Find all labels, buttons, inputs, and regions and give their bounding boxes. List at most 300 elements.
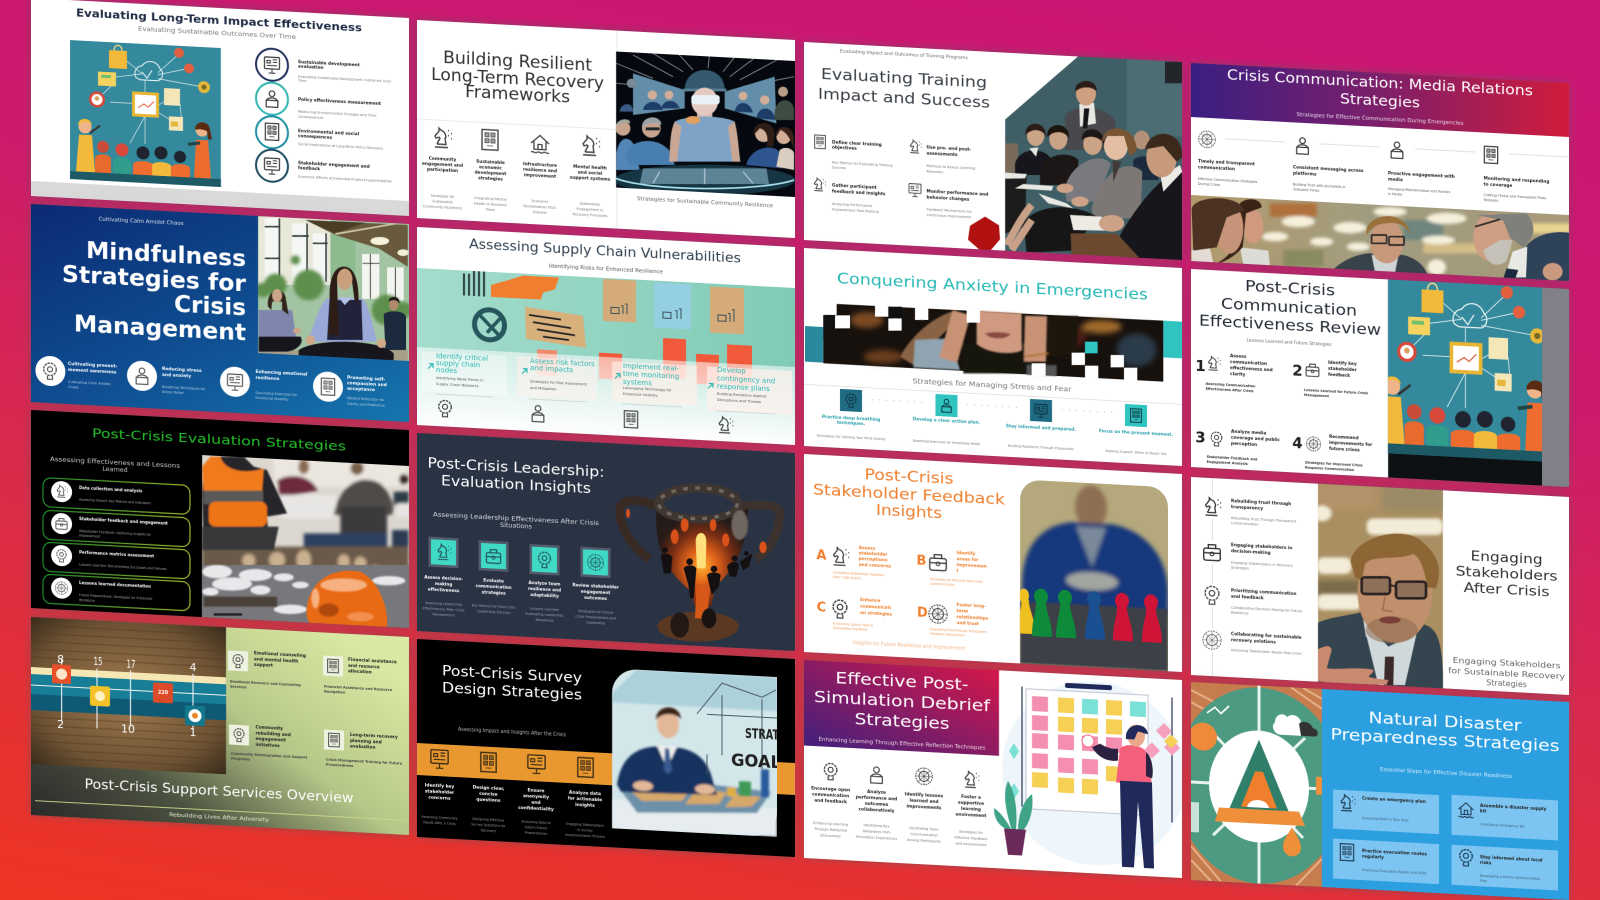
A-D feedback grid: relationships [957,614,989,621]
four communication steps: Releases [1484,198,1498,203]
tagline: Cultivating Calm Amidst Chaos [98,217,184,227]
benefit row [35,355,387,408]
survey columns: Design clear, [473,784,505,792]
stakeholder list: Engaging stakeholders in [1231,542,1292,551]
four debrief columns: Takeaways from [861,829,891,835]
A-D feedback grid: communicati [860,603,892,611]
A-D feedback grid: After Crisis Events [833,575,862,581]
card list: Improvement [79,534,101,539]
title: Post-Crisis [864,465,954,488]
header banner: Crisis Communication: Media Relations [1227,67,1533,100]
leadership steps: Leadership Success [477,609,511,615]
timeline graphic: 10 [121,722,135,736]
four-step strategy row: Develop a clear action plan. [913,416,981,426]
benefit row: Enhancing emotional [255,368,308,377]
four debrief columns: and Improvement [955,842,987,847]
benefit row: compassion and [347,380,387,388]
four debrief columns: outcomes [865,800,889,807]
service grid [228,648,402,771]
four vulnerability steps [428,351,776,435]
stakeholder list: Rebuilding Trust Through Transparent [1231,516,1297,523]
icons row [435,127,600,156]
subtitle: Lessons Learned and Future Strategies [1246,337,1332,348]
title: Preparedness Strategies [1330,724,1560,756]
title: Post-Crisis Survey [442,663,583,687]
title [1456,548,1558,601]
stakeholder list [1202,495,1302,657]
four vulnerability steps: Building Resilience Against [717,392,768,399]
four evaluation tips: Define clear training [832,139,882,148]
title: Impact and Success [818,85,990,112]
survey columns: for actionable [568,795,603,803]
benefit row: Clarity and Resilience [347,402,384,408]
stakeholder list: Rebuilding trust through [1231,498,1291,507]
four evaluation tips: feedback and insights [832,188,886,197]
survey columns: Assessing Community [422,815,458,821]
service grid: Emotional counseling [254,650,306,659]
leadership steps: Analyze team [529,579,561,586]
title: After Crisis [1464,580,1550,600]
preparation cards: regularly [1362,853,1384,860]
leadership steps: adaptability [531,591,559,598]
subtitle: Strategies [1486,678,1527,689]
four-step strategy row: Building Resilience Through Preparation [1008,444,1074,451]
leadership steps: Effectiveness After Crisis [423,606,465,613]
benefit row: Reducing stress [162,365,202,374]
labels: Health in Recovery [474,202,507,207]
A-D feedback grid: Evaluating Post-Through Transparent [930,627,988,634]
panel: slide Effective Post-Simulation Debrief Strategies [804,660,1182,878]
four debrief columns: Analyze [867,788,886,795]
photo: meditating students [258,216,409,361]
illustration: people and network [70,40,221,187]
stakeholder list: Engaging Stakeholders in Recovery [1231,560,1293,568]
benefit row: Mindful Reflection for [347,396,384,402]
leadership steps: Strategies for Future [578,609,613,615]
numbered review items: perception [1231,440,1257,448]
service grid: Programs [231,757,250,762]
subtitle: Learned [102,465,127,473]
four vulnerability steps: Enhanced Visibility [623,392,659,398]
labels: engagement and [422,160,463,168]
service grid: Financial assistance [348,656,396,665]
photo: blurred man and coloured pawns [1020,480,1168,672]
labels: resilience and [523,166,557,174]
subtitle: for Sustainable Recovery [1448,666,1565,681]
four debrief columns: environment [956,811,986,819]
leadership steps: strategies [482,589,506,595]
numbered review items: Stakeholder Feedback and [1207,455,1258,462]
preparation cards: Stay informed about local [1480,854,1543,863]
survey columns: Preparedness [525,831,548,836]
four evaluation tips: Gather participant [832,182,877,190]
leadership steps: Responses [536,618,554,623]
four debrief columns: learned and [910,797,938,805]
header panel: Simulation Debrief [814,687,990,715]
four-step strategy row: techniques. [837,419,866,427]
illustration: person at sticky-note board [994,676,1186,870]
four evaluation tips: Feedback Mechanisms for [926,207,972,214]
photo: woman in helmet at command table [616,52,795,197]
stakeholder list: Assessing Stakeholder Needs Post-Crisis [1231,648,1302,656]
preparation cards: Assessing Risks in Your Area [1362,816,1409,823]
image: supply chain boxes [417,268,795,445]
list: four evaluation items: Consequences [298,115,323,120]
numbered review items: future crises [1329,445,1360,453]
numbered review items: Assess [1230,353,1247,359]
panel: slide Crisis Communication Media Relations Strategies [1191,63,1569,281]
four debrief columns: Communication [910,832,938,838]
list: four evaluation items: Policy effectiveness measurement [298,97,381,107]
card list [43,478,190,611]
A-D feedback grid: areas for [957,556,979,563]
leadership steps: Assess decision- [425,574,464,581]
survey columns: concise [479,790,498,797]
A-D feedback grid: Strategies for Effective Post-Crisis [930,577,983,584]
four debrief columns: and feedback [814,797,847,805]
numbered review items: coverage and public [1231,434,1280,443]
title [818,65,990,112]
list: four evaluation items: Measuring Environmental Changes and Their [298,110,377,118]
timeline graphic: 4 [189,661,196,674]
survey columns: insights [575,801,596,808]
A-D feedback grid: and trust [957,620,979,627]
A-D feedback grid: Communication [930,582,954,587]
stakeholder list: Prioritizing communication [1231,587,1296,597]
leadership steps: engagement [581,588,611,595]
title: Crisis [174,290,246,321]
timeline graphic: 17 [126,658,135,671]
four communication steps: Turbulent Times [1292,188,1320,193]
title: Post-Crisis Evaluation Strategies [92,426,346,454]
subtitle [1448,656,1565,691]
numbered review items: Management [1304,393,1329,398]
header panel: Enhancing Learning Through Effective Reflection Techniques [818,737,986,752]
numbered review items: Recommend [1329,433,1359,441]
service grid: allocation [348,668,371,675]
header panel: Strategies [855,709,950,733]
labels: strategies [478,175,504,182]
title: Effectiveness Review [1199,311,1381,339]
numbered review items: feedback [1328,371,1350,378]
A-D feedback grid: Identify [957,550,976,557]
title: Management [74,309,246,346]
numbered review items [1195,351,1373,473]
service grid: Emotional Recovery and Counseling [230,680,301,687]
labels: Integrating Mental [475,196,507,202]
four vulnerability steps: Identifying Weak Points in [436,376,485,383]
card list: Future Preparedness: Strategies for Enhanced [79,593,152,601]
panel: slide Evaluating Training Impact and Success [804,42,1182,260]
title: Design Strategies [442,680,582,704]
title [442,663,583,704]
four vulnerability steps: Assess risk factors [530,357,595,368]
service grid: evaluation [350,743,375,750]
leadership steps: communication [476,583,512,590]
four vulnerability steps: systems [623,378,653,387]
benefit row: Emotional Stability [255,396,288,402]
service grid: Crisis Management Training for Future [326,758,402,766]
stakeholder list: recovery solutions [1231,637,1276,645]
leadership steps: Key Metrics for Post-Crisis [472,603,516,610]
four evaluation tips [814,135,988,220]
four debrief columns: Encourage open [811,785,850,793]
A-D feedback grid: C [817,600,826,616]
photo: blurred workers and orange beanbag [202,455,409,628]
leadership steps: Crisis Preparedness and [576,614,616,621]
survey columns: Ensure [528,787,545,794]
title: Conquering Anxiety in Emergencies [837,269,1148,304]
benefit row: resilience [255,374,279,382]
preparation cards [1333,789,1558,890]
four debrief columns: supportive [958,799,984,807]
panel: slide Conquering Anxiety in Emergencies [804,248,1182,466]
leadership steps: making [435,580,453,586]
labels: support systems [570,174,611,182]
card list: Stakeholder feedback and engagement [79,516,167,526]
title: Insights [876,501,942,522]
four communication steps: Consistent messaging across [1293,164,1364,173]
A-D feedback grid [816,542,989,639]
title: Evaluating Long-Term Impact Effectiveness [76,7,362,35]
four communication steps: Managing Misinformation and Rumors [1388,187,1451,194]
panel: slide Mindfulness Strategies for Crisis Management [31,204,409,422]
subtitle: Rebuilding Lives After Adversity [169,812,269,824]
title: Building Resilient [443,48,593,75]
A-D feedback grid: stakeholder [859,550,888,558]
numbered review items: Response Communication [1305,466,1355,472]
numbered review items: improvements for [1329,439,1373,448]
tagline: Evaluating Impact and Outcomes of Training Programs [840,48,969,61]
four debrief columns: Discussions [820,833,841,839]
icon: red heptagon [968,216,1000,250]
illustration: preparedness emblem [1191,682,1322,887]
illustration: people and network [1388,279,1542,486]
four vulnerability steps: Supply Chain Networks [436,382,479,388]
leadership steps: Leadership [587,620,605,625]
numbered review items: 3 [1195,428,1206,447]
numbered review items: communication [1230,359,1267,367]
labels: Mental health [573,163,607,171]
service grid: Financial Assistance and Resource [324,685,392,692]
panel: slide Post-Crisis Support Services Overview [31,617,409,835]
card list: Stakeholder Feedback: Gathering Insights for [79,529,151,537]
four debrief columns: improvements [907,803,942,811]
list: four evaluation items: Time [297,79,306,83]
four communication steps: communication [1198,164,1235,172]
labels: economic [479,164,503,171]
photo: tense office conversation [1191,195,1569,281]
labels: Revitalization Post- [524,204,558,210]
photo: seated professionals in boardroom [1005,47,1183,271]
labels: Sustainable [477,158,505,166]
service grid: and resource [348,662,379,670]
four communication steps: platforms [1293,170,1317,177]
numbered review items: 1 [1195,357,1206,375]
survey columns: Engaging Stakeholders [566,822,605,828]
four debrief columns: Effective Feedback [954,835,988,841]
title: Communication [1221,295,1357,320]
A-D feedback grid: Foster long- [957,602,986,609]
subtitle: Strategies for Managing Stress and Fear [912,376,1072,394]
survey columns: Designing Effective [473,817,505,823]
subtitle: Assessing Effectiveness and Lessons [50,456,180,469]
benefit row: Cultivating Calm Amidst [68,380,111,386]
A-D feedback grid: A [816,548,826,564]
title [431,47,605,108]
card list: Data collection and analysis [79,485,143,493]
stakeholder list: Strategies [1231,566,1249,571]
labels: Recovery Processes [573,212,608,218]
leadership steps [423,536,620,626]
title [813,462,1005,526]
survey columns: Needs After a Crisis [424,820,456,826]
preparation cards: kit [1480,808,1486,814]
panel: slide Building Resilient Long-Term Recovery Frameworks [417,20,795,238]
numbered review items: Analyze media [1231,428,1266,436]
panel: slide Post-Crisis Stakeholder Feedback Insights [804,454,1182,672]
labels: Community Resilience [423,204,462,210]
leadership steps: Evaluating Leadership [526,612,564,618]
four evaluation tips: Monitor performance and [926,188,988,197]
subtitle: Assessing Leadership Effectiveness After Crisis [433,510,600,527]
four vulnerability steps: Implement real- [623,362,680,373]
header panel [804,660,999,756]
survey columns: Identify key [425,782,455,789]
A-D feedback grid: on strategies [860,610,893,617]
numbered review items: Engagement Analysis [1207,460,1248,466]
survey columns: anonymity [523,793,549,800]
service grid: initiatives [255,741,280,749]
photo: businessman with strategy sketch [612,669,781,837]
orange band with icons [417,743,795,795]
numbered review items: 2 [1292,361,1303,380]
four communication steps: Proactive engagement with [1388,170,1455,179]
four communication steps: Building Trust with Journalists in [1293,182,1346,189]
numbered review items: Identify key [1328,359,1357,367]
photo banner: stressed woman with checker pattern [805,302,1182,382]
four evaluation tips: assessments [926,150,958,158]
labels: participation [427,166,458,174]
four vulnerability steps: Leveraging Technology for [623,386,672,392]
stakeholder list: Collaborating for sustainable [1231,631,1302,640]
stakeholder list: decision-making [1231,548,1271,556]
stakeholder list: transparency [1231,504,1263,511]
four debrief columns: Enhancing Learning [813,821,848,827]
leadership steps: Review stakeholder [573,582,620,589]
four evaluation tips: Use pre- and post- [926,144,971,152]
title [428,456,605,498]
leadership steps: effectiveness [428,586,460,593]
four debrief columns: Through Reflective [813,827,847,833]
trophy illustration [620,488,780,642]
subtitle: Engaging Stakeholders [1453,656,1561,671]
labels: Engagement in [577,207,604,212]
A-D feedback grid: Evaluating Stakeholder Feedback [833,571,885,577]
preparation cards: risks [1480,859,1492,866]
leadership steps: Management [433,612,456,617]
benefit row: Breathing Techniques for [162,385,206,391]
numbered review items: effectiveness and [1230,365,1273,373]
preparation cards: Creating an Emergency Kit [1480,822,1525,829]
four-step strategy row: Seeking Support: When to Reach Out [1105,449,1167,456]
survey columns: and [532,799,541,806]
four evaluation tips: Retention [926,169,943,174]
panel: slide Natural Disaster Preparedness Strategies [1191,682,1569,900]
leadership steps: Lessons Learned: [530,607,559,612]
leadership steps: Evaluate [484,577,504,583]
service grid: and mental health [254,656,298,664]
list: four evaluation items: Sustainable development [298,59,359,68]
header banner: Strategies for Effective Communication During Emergencies [1297,112,1464,127]
title: Stakeholders [1456,563,1558,585]
timeline graphic: 1 [189,726,196,739]
photo: man with glasses gesturing [1318,484,1444,688]
survey columns: Recovery [481,828,496,833]
four debrief columns: performance and [856,794,897,802]
numbered review items: Lessons Learned for Future Crisis [1304,388,1368,395]
service grid: Preparedness [326,763,353,768]
list: four evaluation items: evaluation [298,63,323,71]
benefit row: Cultivating present- [68,360,117,369]
subtitle: Situations [500,521,533,531]
title: Frameworks [465,82,570,107]
title: Engaging [1471,548,1543,568]
title: Assessing Supply Chain Vulnerabilities [469,237,742,267]
four evaluation tips: Analyzing Performance [832,202,872,208]
title: Strategies for [62,260,246,297]
service grid: engagement [255,735,286,743]
survey columns: Survey Questions for [471,822,507,828]
four debrief columns [811,762,988,847]
A-D feedback grid: D [917,605,928,621]
four evaluation tips: Improvement Post-Training [832,207,879,214]
title: Post-Crisis [1245,277,1335,300]
list: four evaluation items: Stakeholder engagement and [298,160,369,169]
four debrief columns: learning [961,805,981,812]
benefit row: Grounding Exercises for [255,391,297,397]
survey columns: Inform Future [525,825,547,830]
numbered review items: stakeholder [1328,365,1358,373]
benefit row: and anxiety [162,371,191,379]
survey columns: Analyzing Data to [522,820,551,825]
four vulnerability steps: Strategies for Risk Assessment [530,379,588,387]
numbered review items: clarity [1230,371,1246,377]
list: four evaluation items: consequences [298,133,332,140]
survey columns: concerns [429,794,451,801]
A-D feedback grid: Feedback Mechanisms [930,632,965,638]
service grid: Long-term recovery [350,731,398,740]
numbered review items: Effectiveness After Crisis [1206,387,1254,393]
labels: Strategies for [431,194,455,199]
benefit row: Stress Relief [162,390,184,395]
timeline graphic: 15 [93,655,102,668]
A-D feedback grid: improvemen [957,562,987,569]
stakeholder list: and feedback [1231,593,1264,601]
four communication steps: Crafting Timely and Transparent Press [1484,193,1547,200]
preparation cards: Create an emergency plan [1362,796,1426,805]
four vulnerability steps: time monitoring [623,370,680,381]
title: Evaluating Training [821,65,987,92]
benefit row: acceptance [347,385,375,393]
service grid: Services [230,685,246,689]
numbered review items: Assessing Communication [1206,382,1256,388]
header panel: Effective Post- [836,668,968,694]
four communication steps [1198,131,1569,207]
list: four evaluation items [256,48,392,188]
A-D feedback grid: term [957,608,969,614]
A-D feedback grid: t [957,568,959,574]
